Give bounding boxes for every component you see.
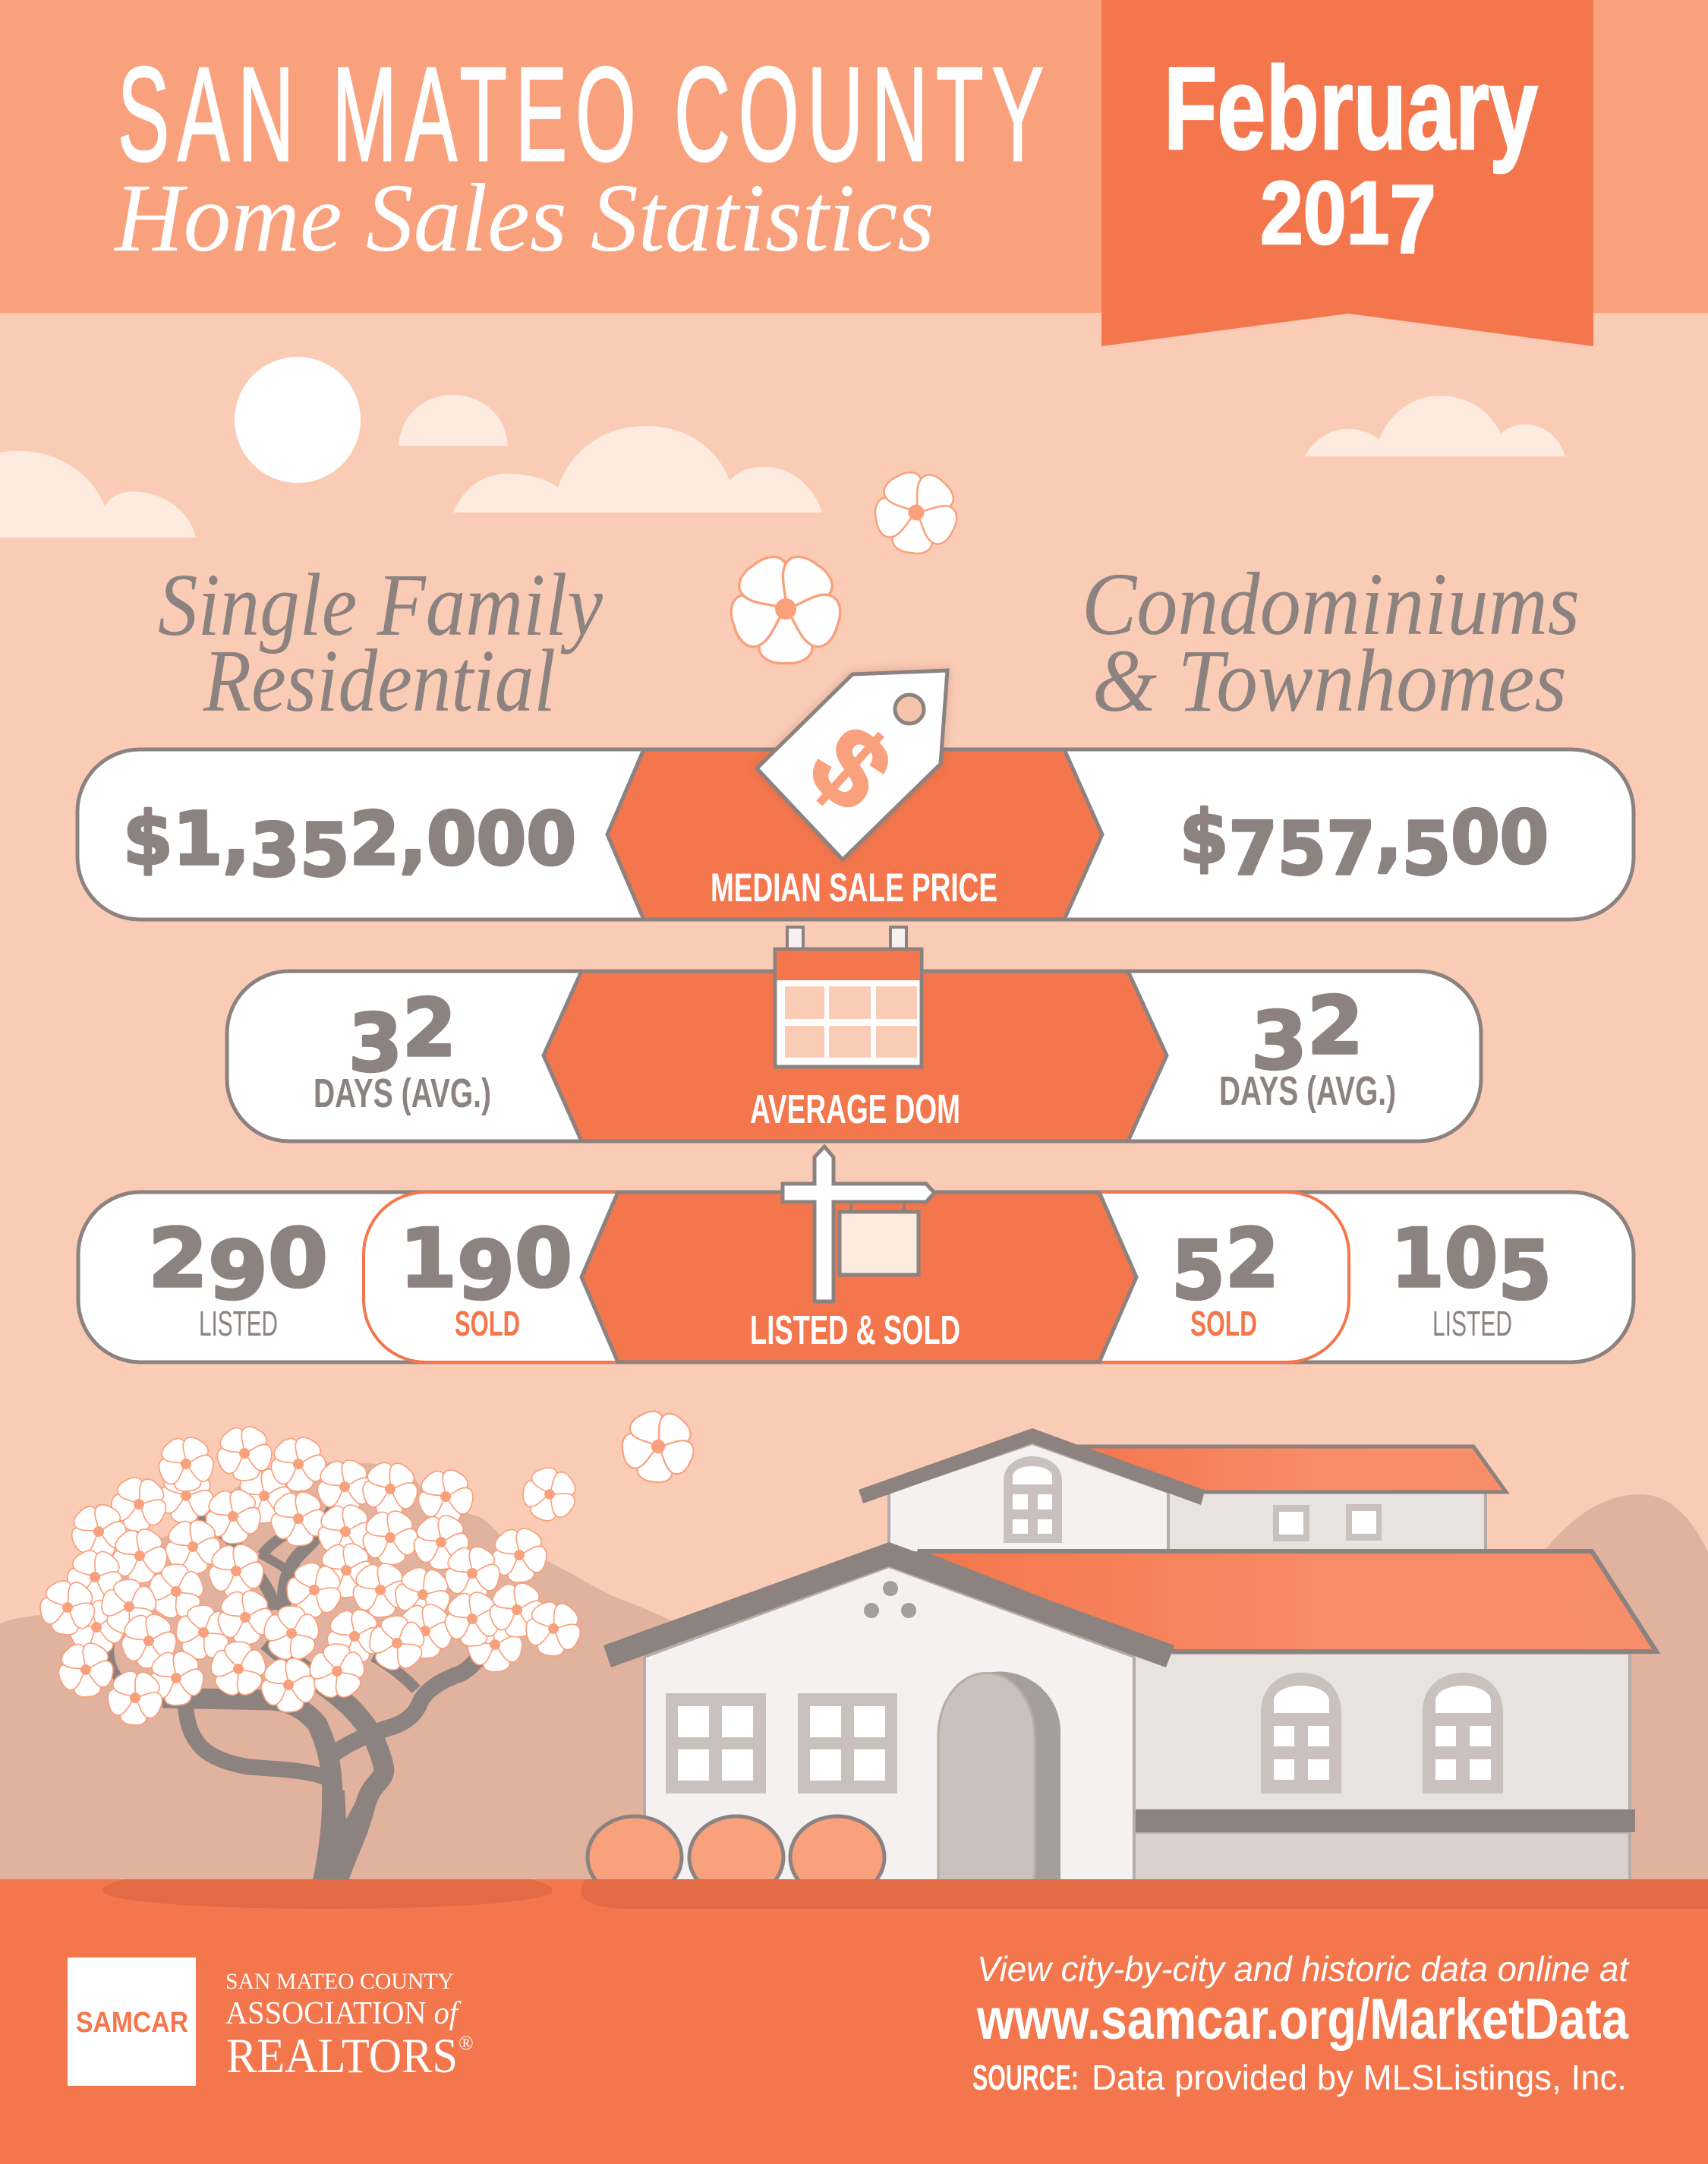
condo listed count: 10 <box>1391 1212 1503 1305</box>
date ribbon <box>1101 0 1593 346</box>
upper roof <box>1078 1446 1506 1492</box>
single family sold count: 9 <box>457 1224 515 1317</box>
association name: REALTORS <box>226 2029 458 2084</box>
tree blossoms <box>34 1421 588 1727</box>
single family price: 35 <box>250 808 349 893</box>
average dom label: AVERAGE DOM <box>750 1087 960 1132</box>
single family price: $1, <box>123 797 252 882</box>
listed and sold label: LISTED & SOLD <box>750 1308 960 1353</box>
condo price: , <box>1376 795 1402 880</box>
median label: MEDIAN SALE PRICE <box>711 866 997 910</box>
single family price: 2,000 <box>349 797 576 882</box>
tree shadow <box>102 1879 553 1909</box>
condo price: $ <box>1180 795 1231 880</box>
association name <box>225 1969 474 2084</box>
tree trunk and branches <box>109 1508 478 1881</box>
lower right wing <box>1133 1653 1635 1881</box>
condo sold count: 5 <box>1171 1224 1225 1317</box>
illustration: house <box>588 1428 1656 1898</box>
shrubs <box>588 1816 884 1898</box>
single family listed count: 2 <box>148 1212 204 1305</box>
panel: average days on market <box>227 927 1481 1141</box>
sun <box>235 357 361 483</box>
heading: single family residential <box>158 555 603 730</box>
ribbon year: 7 <box>1389 166 1436 274</box>
condo days: 2 <box>1307 979 1363 1072</box>
footer call to action <box>972 1949 1630 2097</box>
ribbon month: February <box>1164 43 1538 174</box>
source text: Data provided by MLSListings, Inc. <box>1092 2058 1627 2097</box>
source label: SOURCE: <box>972 2058 1079 2097</box>
association name: ASSOCIATION of <box>225 1996 462 2031</box>
condo price: 757 <box>1228 806 1376 891</box>
heading: condominiums and townhomes <box>1082 554 1580 730</box>
upper gable <box>859 1428 1205 1505</box>
condo listed count: 5 <box>1498 1224 1552 1317</box>
panel: median sale price <box>77 670 1634 920</box>
sky background <box>0 313 1708 1879</box>
lower gable <box>603 1542 1174 1667</box>
heading: condominiums and townhomes: Condominiums <box>1082 554 1580 654</box>
condo sold count: 2 <box>1225 1212 1279 1305</box>
single family days: 2 <box>402 982 456 1074</box>
single family listed count: 9 <box>208 1224 268 1317</box>
condo listed label: LISTED <box>1432 1304 1512 1343</box>
hills <box>0 1462 1708 1879</box>
samcar logo <box>68 1957 196 2086</box>
condo price: 5 <box>1402 806 1451 891</box>
condo sold label: SOLD <box>1190 1304 1257 1343</box>
view online line: View city-by-city and historic data online at <box>977 1949 1630 1989</box>
lower left wall <box>644 1566 1134 1881</box>
lower roof <box>918 1551 1656 1651</box>
ribbon year: 201 <box>1260 163 1410 263</box>
icon: falling blossom by house <box>614 1402 703 1487</box>
heading: condominiums and townhomes: & Townhomes <box>1092 631 1567 730</box>
lower right arched windows <box>1261 1673 1503 1793</box>
icon: calendar <box>775 927 922 1067</box>
ground <box>0 1879 1708 2164</box>
single family sold count: 0 <box>515 1212 572 1305</box>
condo days unit: DAYS (AVG.) <box>1219 1068 1396 1114</box>
icon: blossom tree <box>34 1421 588 1881</box>
subtitle: Home Sales Statistics <box>113 164 934 272</box>
icon: for sale sign <box>783 1147 934 1301</box>
clouds <box>0 395 1565 538</box>
left windows <box>666 1693 897 1793</box>
single family listed count: 0 <box>268 1212 328 1305</box>
header banner <box>0 0 1708 313</box>
icon: price tag <box>757 670 947 860</box>
single family days: 3 <box>348 997 402 1090</box>
single family sold label: SOLD <box>455 1304 520 1343</box>
single family days unit: DAYS (AVG.) <box>314 1071 491 1116</box>
condo days: 3 <box>1251 995 1307 1087</box>
association name: SAN MATEO COUNTY <box>225 1969 454 1994</box>
gable vents <box>864 1581 916 1618</box>
icon: falling blossom large <box>726 550 846 664</box>
heading: single family residential: Residential <box>203 631 556 730</box>
upper storey <box>859 1428 1506 1553</box>
icon: falling blossom upper <box>866 462 967 559</box>
single family sold count: 1 <box>399 1212 455 1305</box>
front door <box>938 1672 1060 1881</box>
upper small windows <box>1273 1504 1382 1541</box>
upper arched window <box>1004 1456 1062 1543</box>
association name: ® <box>459 2032 474 2054</box>
panel: listed and sold <box>78 1147 1634 1362</box>
title: SAN MATEO COUNTY <box>118 40 1044 189</box>
heading: single family residential: Single Family <box>158 555 603 655</box>
condo price: 00 <box>1451 795 1549 880</box>
house shadow <box>581 1879 1708 1909</box>
icon: price tag: $ <box>786 701 915 834</box>
samcar logo: SAMCAR <box>76 2007 188 2039</box>
single family listed label: LISTED <box>199 1304 278 1343</box>
